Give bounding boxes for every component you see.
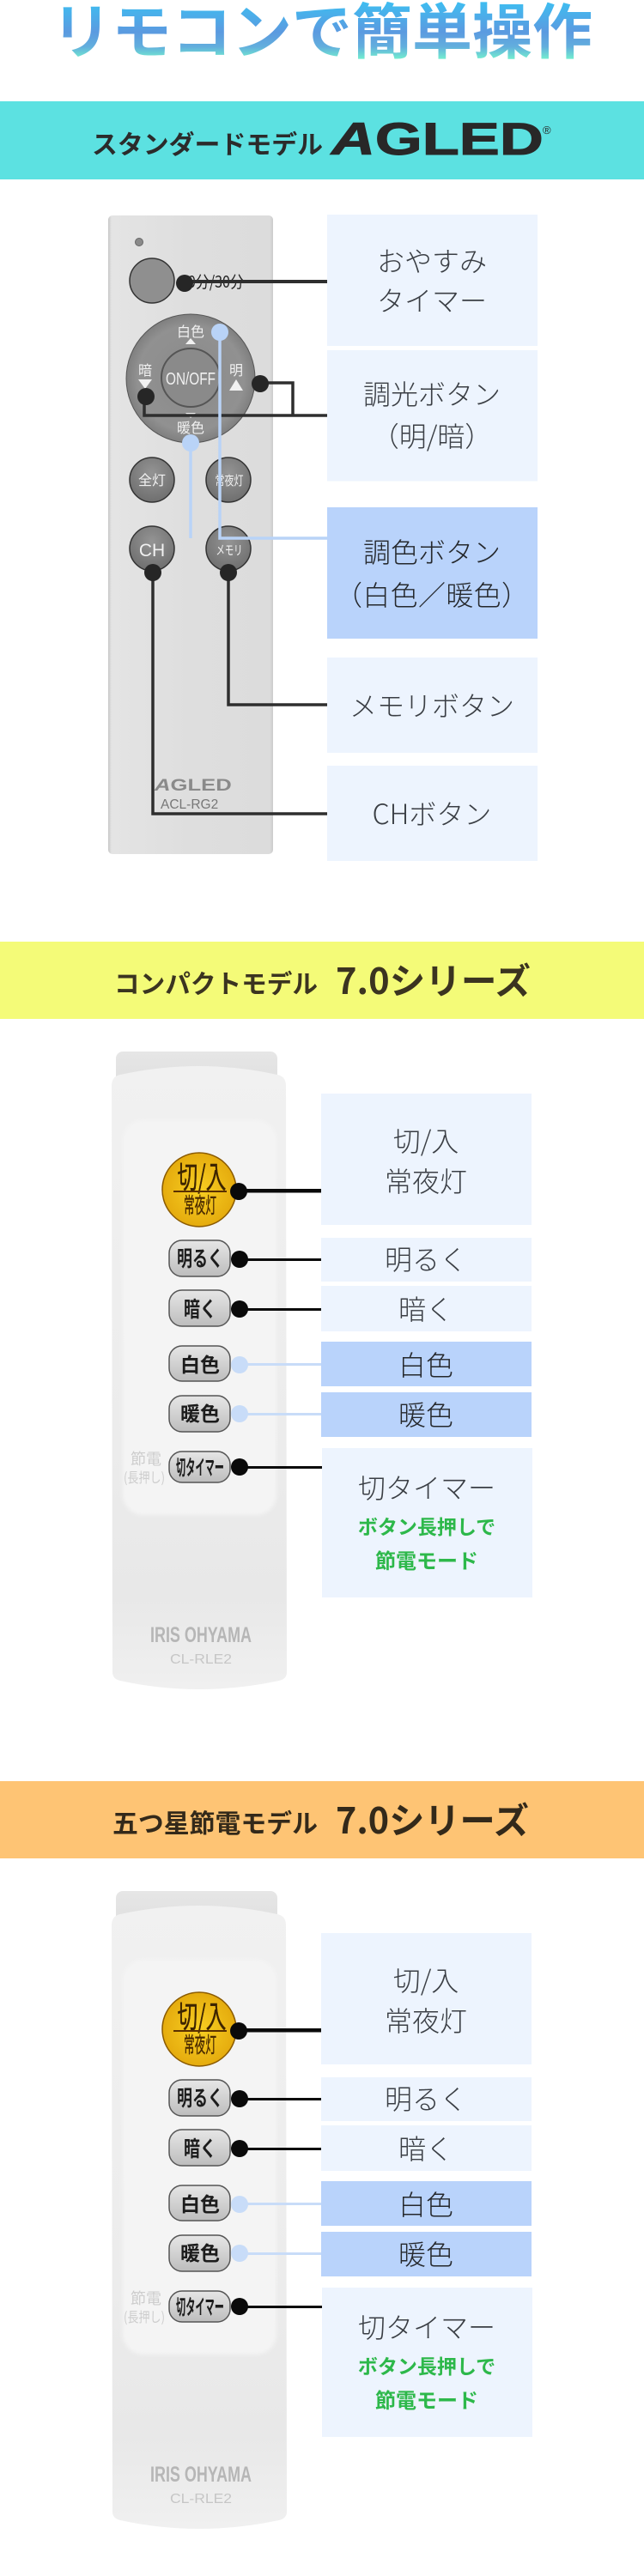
remote body: CL-RLE2 — [112, 1052, 287, 1689]
remote body: CL-RLE2: IRIS OHYAMA — [150, 1623, 252, 1647]
label: memory button: メモリボタン — [349, 685, 514, 724]
label: warm: 暖色 — [398, 1394, 453, 1433]
label: warm — [321, 2232, 532, 2276]
button: off timer — [169, 2290, 230, 2322]
button: power / night light — [162, 1992, 236, 2066]
banner: five-star energy model 7.0 series: 五つ星節電モデル — [112, 1803, 318, 1840]
label: white — [321, 1342, 532, 1386]
button: off timer: 切タイマー — [176, 1451, 224, 1481]
button: darker: 暗く — [184, 2132, 216, 2163]
remote body: CL-RLE2: CL-RLE2 — [170, 2492, 232, 2506]
remote body: ACL-RG2: 白色 — [177, 320, 204, 341]
button: white — [169, 1346, 230, 1381]
button: power / night light: 常夜灯 — [184, 1189, 216, 1220]
button: brighter: 明るく — [177, 1242, 223, 1273]
button: power / night light: 常夜灯 — [184, 2028, 216, 2059]
button: darker: 暗く — [184, 1293, 216, 1324]
label: brighter: 明るく — [385, 2078, 467, 2118]
remote body: ACL-RG2: 常夜灯 — [215, 471, 244, 489]
label: power / night light — [321, 1094, 532, 1225]
label: colour button: 調色ボタン — [363, 531, 501, 571]
label: off timer with power-saving note: ボタン長押しで — [358, 2350, 495, 2379]
label: CH button — [327, 766, 538, 861]
label: dimming button — [327, 350, 538, 481]
label: sleep timer — [327, 215, 538, 346]
label: off timer with power-saving note — [322, 2288, 532, 2437]
banner: standard model AGLED: ® — [543, 124, 551, 136]
button: brighter — [169, 2080, 230, 2116]
button: power / night light — [162, 1153, 236, 1227]
button: white: 白色 — [180, 1349, 220, 1378]
connector: memory — [220, 564, 327, 705]
banner: five-star energy model 7.0 series — [0, 1781, 644, 1858]
label: darker: 暗く — [398, 2128, 453, 2167]
remote body: ACL-RG2 — [108, 215, 273, 854]
label: brighter — [321, 1238, 532, 1282]
label: white: 白色 — [398, 1344, 453, 1384]
banner: compact model 7.0 series: 7.0シリーズ — [336, 953, 531, 1005]
button: brighter — [169, 1240, 230, 1276]
button: warm — [169, 1396, 230, 1432]
label: warm — [321, 1392, 532, 1437]
label: off timer with power-saving note — [322, 1448, 532, 1597]
connectors — [230, 1183, 322, 1476]
label: warm: 暖色 — [398, 2234, 453, 2273]
remote body: ACL-RG2: ACL-RG2 — [161, 797, 218, 812]
label: white — [321, 2181, 532, 2226]
label: dimming button: 調光ボタン — [363, 373, 501, 413]
remote body: CL-RLE2: (長押し) — [124, 2306, 165, 2326]
label: off timer with power-saving note: 切タイマー — [358, 1467, 495, 1506]
label: brighter: 明るく — [385, 1239, 467, 1278]
remote body: CL-RLE2: CL-RLE2 — [170, 1652, 232, 1667]
label: colour button: （白色／暖色） — [335, 574, 529, 614]
label: off timer with power-saving note: 節電モード — [375, 1544, 478, 1574]
label: power / night light: 常夜灯 — [385, 1161, 467, 1200]
button: off timer: 切タイマー — [176, 2290, 224, 2320]
remote body: ACL-RG2: CH — [139, 541, 165, 561]
banner: compact model 7.0 series — [0, 942, 644, 1019]
label: power / night light: 切/入 — [393, 1960, 459, 1999]
button: power / night light: 切/入 — [177, 1153, 227, 1197]
label: white: 白色 — [398, 2184, 453, 2223]
label: off timer with power-saving note: 節電モード — [375, 2384, 478, 2414]
remote body: CL-RLE2: (長押し) — [124, 1466, 165, 1487]
label: darker: 暗く — [398, 1288, 453, 1328]
label: off timer with power-saving note: ボタン長押しで — [358, 1511, 495, 1540]
label: power / night light: 切/入 — [393, 1120, 459, 1160]
label: sleep timer: タイマー — [377, 280, 487, 319]
label: brighter — [321, 2077, 532, 2121]
banner: standard model AGLED — [0, 101, 644, 179]
button: darker — [169, 1290, 230, 1326]
panel: five-star remote diagram — [112, 1891, 532, 2529]
remote body: ACL-RG2: 全灯 — [138, 469, 166, 489]
remote body: ACL-RG2: ON/OFF — [166, 370, 216, 389]
button: warm: 暖色 — [180, 1397, 220, 1427]
remote body: CL-RLE2: 節電 — [131, 1447, 161, 1470]
button: warm: 暖色 — [180, 2237, 220, 2266]
label: memory button — [327, 658, 538, 753]
label: power / night light — [321, 1933, 532, 2064]
connector: colour tone — [182, 324, 327, 538]
panel: AGLED remote diagram — [108, 215, 538, 861]
button: warm — [169, 2235, 230, 2271]
button: darker — [169, 2130, 230, 2166]
remote body: ACL-RG2: 暗 — [138, 359, 152, 379]
remote body: CL-RLE2 — [112, 1891, 287, 2529]
remote body: ACL-RG2: 60分/30分 — [180, 270, 244, 293]
label: dimming button: （明/暗） — [372, 415, 492, 455]
button: off timer — [169, 1451, 230, 1482]
label: darker — [321, 1286, 532, 1331]
banner: standard model AGLED: スタンダードモデル — [92, 124, 323, 161]
connector: dimming — [137, 375, 327, 415]
connectors — [230, 2022, 322, 2315]
remote body: ACL-RG2: メモリ — [216, 541, 242, 559]
label: sleep timer: おやすみ — [377, 240, 487, 280]
label: colour button — [327, 507, 538, 639]
banner: five-star energy model 7.0 series: 7.0シリーズ — [336, 1792, 529, 1845]
connector: timer — [176, 275, 327, 292]
label: off timer with power-saving note: 切タイマー — [358, 2306, 495, 2346]
connector: CH — [144, 564, 327, 814]
label: power / night light: 常夜灯 — [385, 2000, 467, 2040]
banner: standard model AGLED: AGLED — [330, 114, 544, 165]
remote body: ACL-RG2: 暖色 — [177, 416, 204, 437]
button: white — [169, 2185, 230, 2221]
remote body: ACL-RG2: AGLED — [154, 776, 232, 794]
remote body: ACL-RG2: 明 — [229, 359, 243, 379]
remote body: CL-RLE2: 節電 — [131, 2287, 161, 2309]
banner: compact model 7.0 series: コンパクトモデル — [114, 963, 318, 1001]
panel: compact remote diagram — [112, 1052, 532, 1689]
label: darker — [321, 2125, 532, 2171]
button: brighter: 明るく — [177, 2082, 223, 2112]
button: power / night light: 切/入 — [177, 1992, 227, 2037]
label: CH button: CHボタン — [373, 793, 491, 833]
remote body: CL-RLE2: IRIS OHYAMA — [150, 2463, 252, 2487]
button: white: 白色 — [180, 2188, 220, 2217]
